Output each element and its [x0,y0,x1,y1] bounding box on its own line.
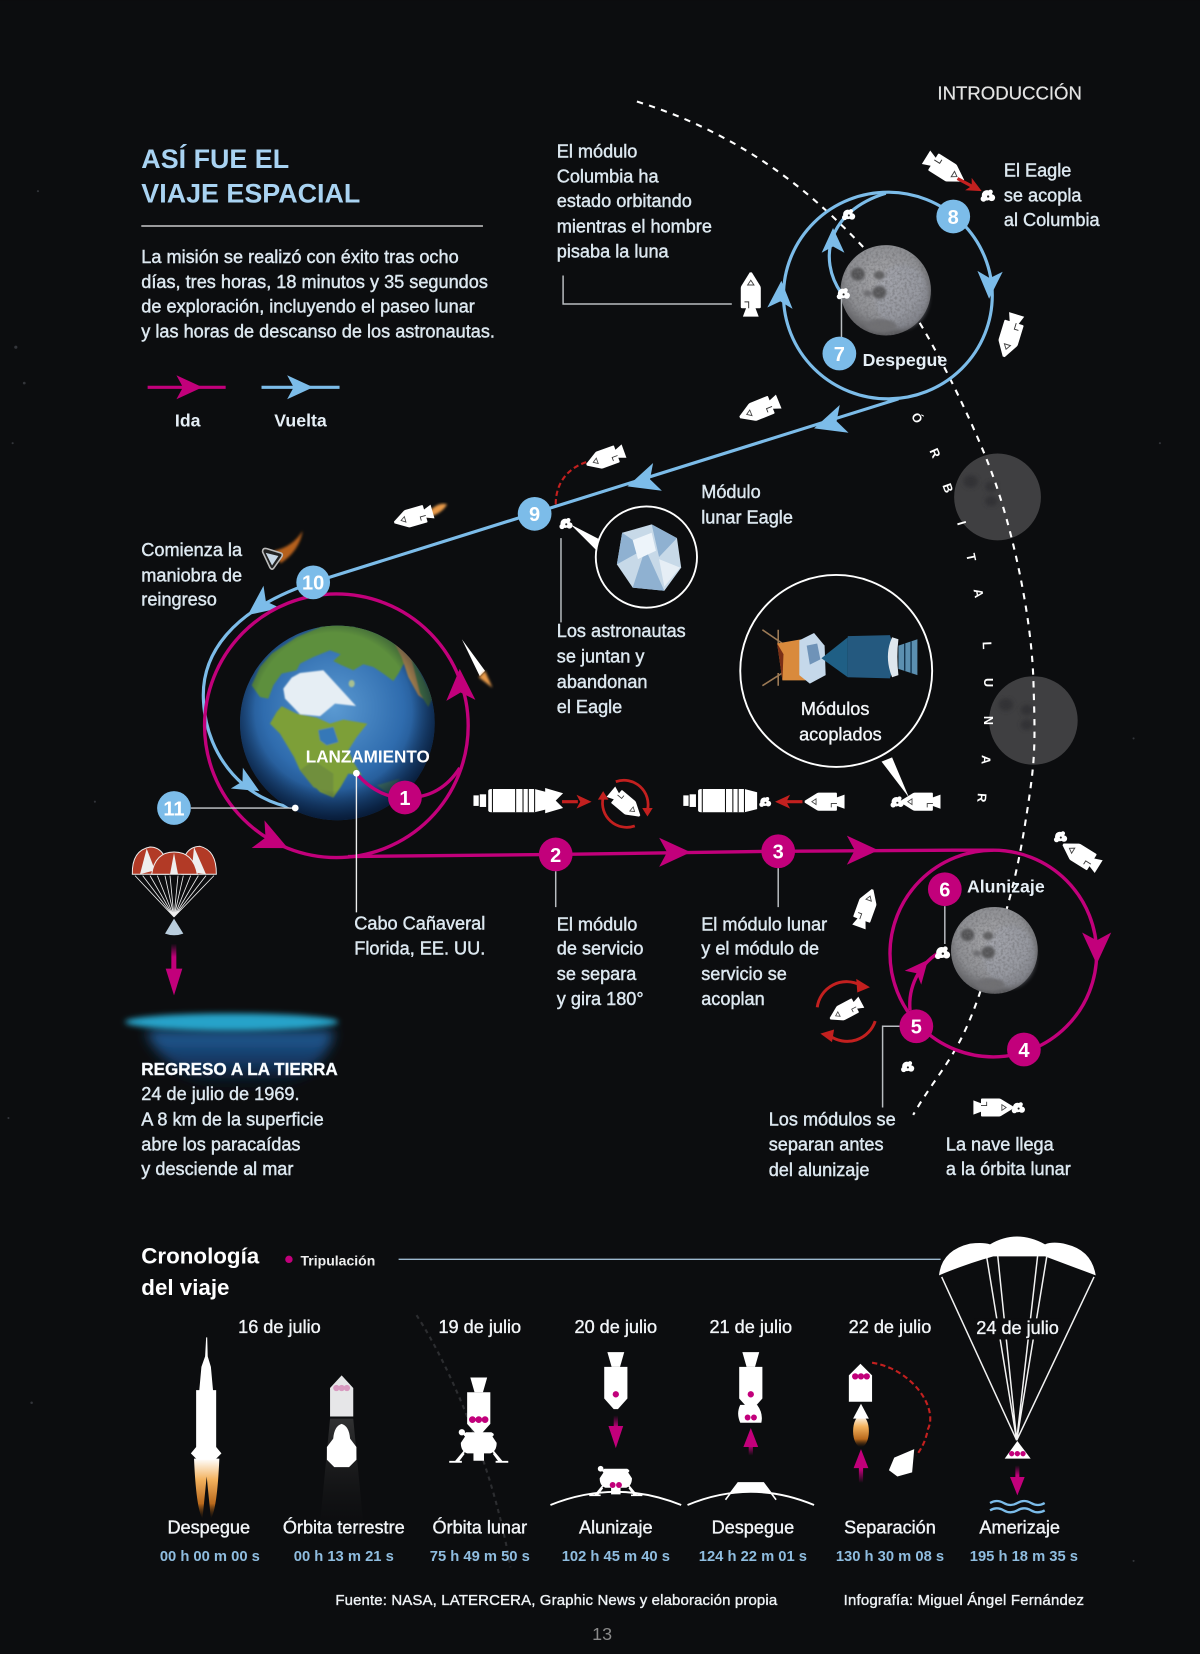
text: step 3: servicio se [701,964,787,984]
label: órbita lunar vertical letters: R [927,446,943,460]
text: Comienza la maniobra: Comienza la [141,540,243,560]
event labels row: Separación [844,1518,936,1538]
text: Comienza la maniobra: maniobra de [141,565,242,585]
step badges: 9 [529,504,540,526]
return route (blue) [203,192,1003,808]
text: step 2: El módulo [557,914,637,934]
page number: 13 [592,1624,612,1644]
dates row: 20 de julio [574,1317,657,1337]
text: El módulo Columbia: Columbia ha [557,167,659,187]
text: step 5: separan antes [769,1135,884,1155]
outbound route (magenta) [205,594,1111,1057]
text: El Eagle se acopla: El Eagle [1004,160,1071,180]
text: Cabo Cañaveral: Florida, EE. UU. [354,939,485,959]
dates row: 22 de julio [849,1317,931,1337]
chrono icon: earth orbit [320,1375,364,1529]
leader: Cabo Cañaveral [353,770,360,912]
step badges: 2 [550,845,561,867]
spacecraft icons around the moon [736,149,1104,1117]
label: órbita lunar vertical letters: L [980,641,994,650]
label: órbita lunar vertical letters [908,410,995,803]
icon: rotation arrows at step 5 [817,979,875,1042]
lunar orbit dashed line [637,102,1034,1115]
label: órbita lunar vertical letters: I [954,520,969,527]
leader: step 11 [191,805,299,811]
inset: módulos acoplados: acoplados [799,725,882,745]
text: Cabo Cañaveral: Cabo Cañaveral [354,913,485,933]
step badges: 4 [1018,1040,1030,1062]
label: órbita lunar vertical letters: U [981,678,995,687]
chrono icon: rocket [191,1337,221,1519]
label: órbita lunar vertical letters: N [981,716,995,725]
text: step 2: se separa [557,964,637,984]
title: VIAJE ESPACIAL [141,179,360,209]
mission times row [160,1549,1078,1565]
label: órbita lunar vertical letters: B [939,482,956,495]
inset: Eagle [559,506,697,608]
label: órbita lunar vertical letters: R [974,793,989,803]
text: Los astronautas: abandonan [557,672,648,692]
chronology heading: del viaje [141,1275,229,1300]
icon: rocket [462,639,492,688]
earth [240,624,435,820]
text: Módulo lunar Eagle: lunar Eagle [701,507,793,527]
event labels row: Alunizaje [579,1518,653,1538]
ghost moon 1 [954,454,1041,540]
step badges: 3 [773,842,784,864]
text: step 2: de servicio [557,939,643,959]
icon: capsule with flame [392,503,447,531]
text: step 5: Los módulos se [769,1109,896,1129]
title: ASÍ FUE EL [141,143,289,174]
intro text: y las horas de descanso de los astronautas. [141,322,495,342]
dates row: 24 de julio [976,1318,1059,1338]
chrono icon: landing [550,1352,681,1505]
label: órbita lunar vertical letters: Ó [908,410,926,426]
mission times row: 00 h 13 m 21 s [294,1549,394,1565]
ghost moon 2 [989,676,1078,765]
dates row: 16 de julio [238,1317,321,1337]
intro text: La misión se realizó con éxito tras ocho [141,247,459,267]
text: Los astronautas: el Eagle [557,697,622,717]
text: El Eagle se acopla: se acopla [1004,186,1082,206]
step badges: 5 [911,1017,922,1039]
text: step 5: del alunizaje [769,1160,869,1180]
chronology heading: Cronología [141,1244,260,1269]
inset: módulos acoplados: Módulos [801,699,869,719]
chrono icon: lunar orbit [449,1377,508,1462]
mission times row: 75 h 49 m 50 s [430,1549,530,1565]
dates row: 21 de julio [709,1317,792,1337]
mission times row: 130 h 30 m 08 s [836,1549,944,1565]
label: órbita lunar vertical letters: A [971,588,986,599]
mission times row: 00 h 00 m 00 s [160,1549,260,1565]
label: alunizaje: Alunizaje [967,876,1045,896]
legend: Vuelta [274,410,327,430]
chrono icon: splashdown parachute [939,1236,1096,1512]
text: regreso a la tierra: y desciende al mar [141,1159,293,1179]
chrono icon: separation [849,1363,930,1483]
intro text: días, tres horas, 18 minutos y 35 segundos [141,272,488,292]
section tag: introducción: INTRODUCCIÓN [937,82,1082,103]
moon: bottom [951,907,1038,994]
source credit: Fuente: NASA, LATERCERA, Graphic News y elaboración propia [335,1592,778,1609]
chrono icon: lunar takeoff [688,1352,814,1505]
text: step 4: La nave llega [946,1135,1055,1155]
legend: Ida [175,410,201,430]
text: regreso a la tierra: REGRESO A LA TIERRA [141,1060,338,1079]
dates row [238,1317,1061,1339]
crew legend: Tripulación [301,1253,375,1269]
docking sequence icons [473,780,940,827]
text: step 3: El módulo lunar [701,914,827,934]
icon: capsule with red dashed path [556,443,627,504]
text: Comienza la maniobra: reingreso [141,590,217,610]
text: Módulo lunar Eagle: Módulo [701,482,761,502]
text: regreso a la tierra: A 8 km de la superficie [141,1109,324,1129]
text: regreso a la tierra: abre los paracaídas [141,1135,301,1155]
text: step 3: acoplan [701,989,765,1009]
label: despegue: Despegue [863,350,947,370]
event labels row: Órbita terrestre [283,1517,405,1538]
text: El módulo Columbia: estado orbitando [557,191,692,211]
event labels row: Amerizaje [979,1518,1060,1538]
sea [125,1013,338,1091]
author credit: Infografía: Miguel Ángel Fernández [844,1592,1084,1609]
event labels row: Despegue [712,1518,794,1538]
moon: top [841,245,931,335]
dates row: 19 de julio [438,1317,521,1337]
text: step 4: a la órbita lunar [946,1159,1071,1179]
event labels row [167,1517,1060,1538]
text: El Eagle se acopla: al Columbia [1004,210,1100,230]
mission times row: 102 h 45 m 40 s [562,1549,670,1565]
step badges: 1 [399,788,410,810]
legend [148,375,340,430]
event labels row: Órbita lunar [432,1517,527,1538]
label: lanzamiento: LANZAMIENTO [306,748,430,767]
label: órbita lunar vertical letters: A [979,755,993,764]
event labels row: Despegue [167,1518,250,1538]
text: El módulo Columbia: El módulo [557,141,637,161]
step badges [157,200,1041,1066]
step badges: 6 [939,880,950,902]
step badges: 11 [163,798,185,820]
label: órbita lunar vertical letters: T [963,552,979,563]
icon: reentry capsule [263,531,303,569]
mission times row: 124 h 22 m 01 s [699,1549,807,1565]
text: El módulo Columbia: pisaba la luna [557,242,670,262]
text: regreso a la tierra: 24 de julio de 1969. [141,1084,300,1104]
text: Los astronautas: se juntan y [557,647,645,667]
text: step 2: y gira 180° [557,989,644,1009]
stars [7,190,1161,1562]
text: step 3: y el módulo de [701,939,819,959]
step badges: 8 [948,207,959,229]
mission times row: 195 h 18 m 35 s [970,1549,1078,1565]
step badges: 7 [834,344,845,366]
intro text: de exploración, incluyendo el paseo lunar [141,296,475,316]
inset: módulos acoplados [740,575,932,797]
text: El módulo Columbia: mientras el hombre [557,216,712,236]
leaders for steps [556,276,945,1107]
parachute capsule descending [132,846,216,995]
step badges: 10 [302,573,324,595]
text: Los astronautas: Los astronautas [557,621,686,641]
